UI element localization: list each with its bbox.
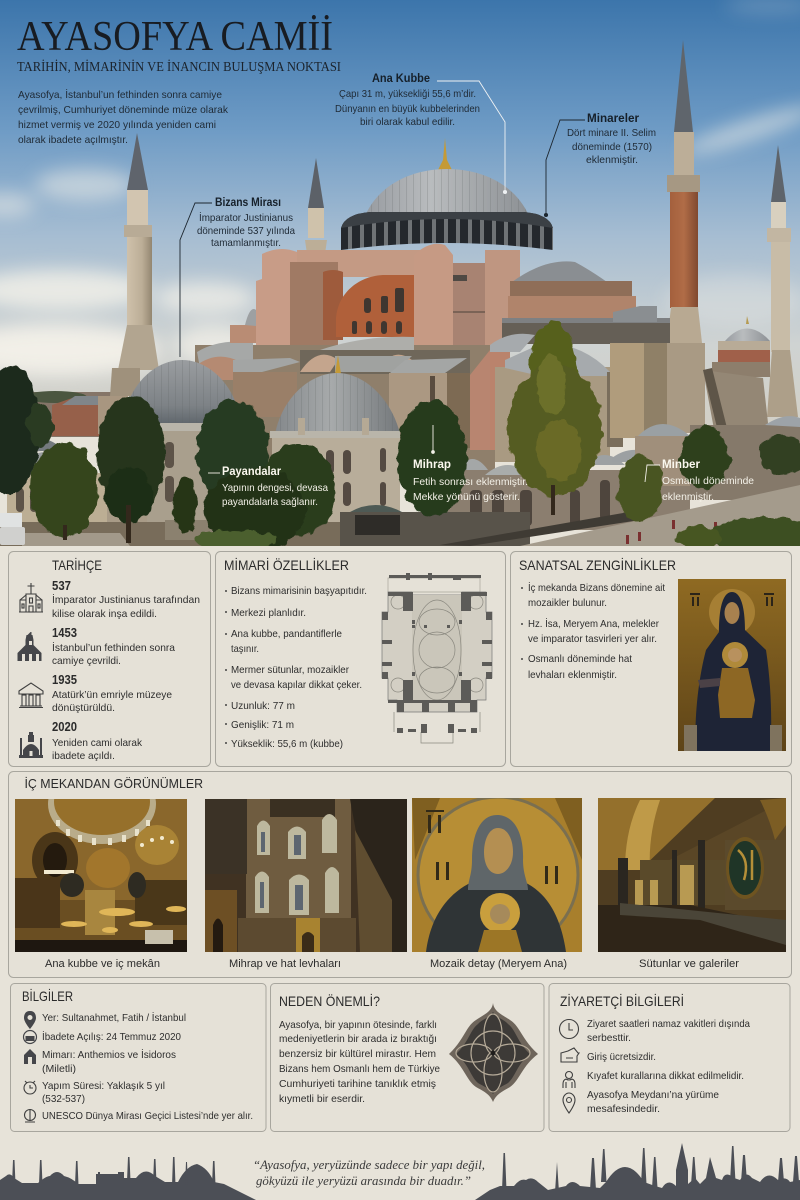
visitor list: Kıyafet kurallarına dikkat edilmelidir.	[587, 1070, 744, 1082]
visitor list: Giriş ücretsizdir.	[587, 1051, 656, 1063]
callout: Ana Kubbe: Çapı 31 m, yüksekliği 55,6 m’dir.	[339, 88, 476, 100]
panel: Sanatsal Zenginlikler	[510, 552, 792, 766]
callout: Bizans Mirası: tamamlanmıştır.	[211, 237, 281, 249]
callout: Ana Kubbe: Dünyanın en büyük kubbelerinden	[335, 103, 480, 115]
callout: Mihrap: Mihrap	[413, 457, 451, 471]
panel: Tarihçe	[8, 552, 210, 766]
icon: stopwatch	[24, 1081, 36, 1094]
callout: Bizans Mirası: İmparator Justinianus	[199, 211, 293, 224]
callout: Minber: Osmanlı döneminde	[662, 475, 754, 487]
paragraph: kıymetli bir eserdir.	[279, 1093, 365, 1105]
feature list: Uzunluk: 77 m	[231, 700, 295, 712]
callout: Mihrap: Fetih sonrası eklenmiştir.	[413, 476, 528, 488]
event 2020: ibadete açıldı.	[52, 750, 115, 762]
mosaic image: Virgin and Child	[678, 579, 786, 751]
callout: Bizans Mirası: Bizans Mirası	[215, 197, 281, 209]
callout: Payandalar	[222, 464, 328, 508]
event 1453: 1453	[52, 626, 77, 640]
visitor list	[587, 1018, 750, 1115]
callout: Ana Kubbe	[335, 73, 480, 128]
intro text	[18, 88, 229, 146]
icon: prayer	[24, 1030, 36, 1044]
heading: İç Mekandan Görünümler: İÇ MEKANDAN GÖRÜNÜMLER	[24, 776, 203, 791]
event 537: kilise olarak inşa edildi.	[52, 608, 157, 620]
event 2020	[52, 720, 143, 762]
heading: Bilgiler: BİLGİLER	[22, 987, 73, 1004]
title: AYASOFYA CAMİİ	[17, 14, 333, 60]
panel: Neden Önemli	[270, 984, 544, 1132]
quote: “Ayasofya, yeryüzünde sadece bir yapı değil,	[253, 1158, 485, 1172]
lower right small domes	[430, 424, 690, 530]
tree trunks	[63, 485, 555, 543]
icon: person	[563, 1072, 575, 1088]
central small dome with building	[270, 355, 400, 523]
paragraph: Cumhuriyeti tarihine tanıklık etmiş	[279, 1078, 436, 1090]
panel: İç Mekandan Görünümler	[8, 764, 792, 978]
callout: Minber	[662, 457, 754, 503]
skyline: left	[0, 1157, 256, 1200]
callout: Minareler: döneminde (1570)	[572, 141, 652, 153]
event 1935	[52, 673, 172, 714]
caption: Mozaik detay (Meryem Ana)	[430, 958, 567, 970]
panel: Bilgiler	[10, 984, 266, 1132]
paragraph: medeniyetlerin bir arada iz bıraktığı	[279, 1033, 437, 1045]
main walls	[256, 244, 520, 345]
paragraph: benzersiz bir kültürel mirastır. Hem	[279, 1048, 436, 1060]
intro text: Ayasofya, İstanbul’un fethinden sonra camiye	[18, 88, 222, 101]
caption: Sütunlar ve galeriler	[639, 958, 739, 970]
right brick minaret	[667, 40, 702, 343]
event 1453: İstanbul’un fethinden sonra	[52, 641, 175, 654]
intro text: olarak ibadete açılmıştır.	[18, 134, 128, 146]
callout: Minareler: eklenmiştir.	[586, 154, 638, 166]
street and plaza	[0, 485, 800, 546]
callout: Ana Kubbe: biri olarak kabul edilir.	[360, 116, 455, 128]
icon: map pin	[563, 1093, 575, 1113]
lower masonry and roofs	[195, 309, 800, 500]
event 537	[52, 579, 200, 620]
info list: Yer: Sultanahmet, Fatih / İstanbul	[42, 1011, 186, 1024]
quote	[253, 1158, 485, 1188]
feature list: taşınır.	[231, 643, 259, 655]
intro text: çevrilmiş, Cumhuriyet döneminde müze olarak	[18, 104, 229, 116]
event 2020: Yeniden cami olarak	[52, 737, 143, 749]
icon: mosque	[19, 732, 43, 758]
art list: ve imparator tasvirleri yer alır.	[528, 633, 657, 645]
far right minaret	[767, 145, 798, 417]
callout: Mihrap	[413, 457, 528, 503]
distant city	[34, 391, 110, 437]
icon: architect	[24, 1049, 36, 1064]
event 1935: dönüştürüldü.	[52, 702, 115, 714]
callout: Bizans Mirası: döneminde 537 yılında	[197, 225, 295, 237]
event 537: İmparator Justinianus tarafından	[52, 593, 200, 606]
event 1453: camiye çevrildi.	[52, 655, 121, 667]
caption: Ana kubbe ve iç mekân	[45, 958, 160, 970]
feature list: Yükseklik: 55,6 m (kubbe)	[231, 738, 343, 750]
info list: (532-537)	[42, 1093, 85, 1105]
right semi dome	[502, 261, 670, 344]
info list: İbadete Açılış: 24 Temmuz 2020	[42, 1030, 181, 1043]
dark leaders	[180, 120, 585, 357]
intro text: hizmet vermiş ve 2020 yılında yeniden cami	[18, 119, 216, 131]
callout: Minareler	[567, 113, 656, 166]
heading: Mimari Özellikler: MİMARİ ÖZELLİKLER	[224, 556, 349, 573]
icon: ticket	[561, 1048, 579, 1062]
icon: UNESCO	[24, 1109, 36, 1122]
callout: Mihrap: Mekke yönünü gösterir.	[413, 491, 520, 503]
icon: church	[19, 583, 43, 612]
callout: Minber: Minber	[662, 457, 700, 471]
feature list: Mermer sütunlar, mozaikler	[231, 664, 349, 676]
subtitle: TARİHİN, MİMARİNİN VE İNANCIN BULUŞMA NOKTASI	[17, 59, 341, 74]
visitor list: Ayasofya Meydanı’na yürüme	[587, 1089, 719, 1101]
paragraph	[279, 1019, 440, 1105]
heading: Ziyaretçi Bilgileri: ZİYARETÇİ BİLGİLERİ	[560, 992, 684, 1009]
callout: Minareler: Minareler	[587, 113, 640, 125]
info list: UNESCO Dünya Mirası Geçici Listesi’nde yer alır.	[42, 1110, 253, 1122]
quote: gökyüzü ile yeryüzü arasında bir duadır.”	[256, 1174, 471, 1188]
art list: İç mekanda Bizans dönemine ait	[528, 581, 665, 594]
art list: Hz. İsa, Meryem Ana, melekler	[528, 617, 659, 630]
callout: Bizans Mirası	[197, 197, 295, 249]
panel: Ziyaretçi Bilgileri	[549, 984, 790, 1132]
callout: Payandalar: Payandalar	[222, 464, 281, 478]
feature list: Merkezi planlıdır.	[231, 607, 306, 619]
callout: Payandalar: Yapının dengesi, devasa	[222, 482, 328, 494]
photo: mosaic detail	[412, 797, 582, 953]
trees	[0, 320, 800, 553]
left minaret	[98, 133, 159, 434]
caption: Mihrap ve hat levhaları	[229, 958, 341, 970]
panel: Mimari Özellikler	[216, 552, 506, 766]
art list: levhaları eklenmiştir.	[528, 669, 617, 681]
info list: (Miletli)	[42, 1063, 76, 1075]
sky with clouds	[0, 0, 800, 430]
heading: Neden Önemli: NEDEN ÖNEMLİ?	[279, 992, 380, 1009]
callout: Minber: eklenmiştir.	[662, 491, 714, 503]
photo: columns and galleries	[598, 798, 786, 952]
art list: Osmanlı döneminde hat	[528, 653, 632, 665]
icon: clock	[560, 1020, 578, 1038]
icon: location pin	[24, 1011, 36, 1029]
skyline: right	[475, 1143, 800, 1200]
feature list: ve devasa kapılar dikkat çeker.	[231, 679, 362, 691]
paragraph: Ayasofya, bir yapının ötesinde, farklı	[279, 1019, 437, 1031]
hero photograph: Hagia Sophia	[0, 0, 800, 553]
event 1453	[52, 626, 175, 667]
icon: museum	[19, 683, 43, 708]
info list: Mimarı: Anthemios ve İsidoros	[42, 1048, 176, 1061]
visitor list: mesafesindedir.	[587, 1103, 660, 1115]
callout: Ana Kubbe: Ana Kubbe	[372, 73, 430, 85]
event 1935: Atatürk’ün emriyle müzeye	[52, 689, 172, 701]
ornament	[449, 1003, 538, 1102]
feature list: Bizans mimarisinin başyapıtıdır.	[231, 585, 367, 597]
paragraph: Bizans hem Osmanlı hem de Türkiye	[279, 1063, 440, 1075]
event 1935: 1935	[52, 673, 77, 687]
photo: main dome interior	[15, 799, 187, 952]
visitor list: Ziyaret saatleri namaz vakitleri dışında	[587, 1018, 750, 1030]
floor plan	[382, 573, 492, 743]
feature list: Ana kubbe, pandantiflerle	[231, 628, 342, 640]
feature list	[225, 585, 367, 750]
visitor list: serbesttir.	[587, 1032, 631, 1044]
callout: Minareler: Dört minare II. Selim	[567, 127, 656, 139]
main dome with drum and gold finial	[341, 138, 553, 250]
info list	[42, 1011, 253, 1122]
art list: mozaikler bulunur.	[528, 597, 607, 609]
info list: Yapım Süresi: Yaklaşık 5 yıl	[42, 1080, 165, 1092]
art list	[521, 581, 665, 681]
callout: Payandalar: payandalarla sağlanır.	[222, 496, 318, 508]
heading: Sanatsal Zenginlikler: SANATSAL ZENGİNLİKLER	[519, 556, 676, 573]
heading: Tarihçe: TARİHÇE	[52, 556, 102, 573]
white leaders	[208, 425, 660, 482]
event 2020: 2020	[52, 720, 77, 734]
icon: chapel	[18, 632, 42, 661]
photo: mihrab and calligraphy	[205, 799, 407, 952]
small front minaret	[305, 158, 327, 254]
leader lines over dome	[437, 81, 507, 194]
feature list: Genişlik: 71 m	[231, 719, 294, 731]
small right dome building	[712, 316, 770, 377]
lower left building with dome	[7, 360, 241, 526]
event 537: 537	[52, 579, 71, 593]
